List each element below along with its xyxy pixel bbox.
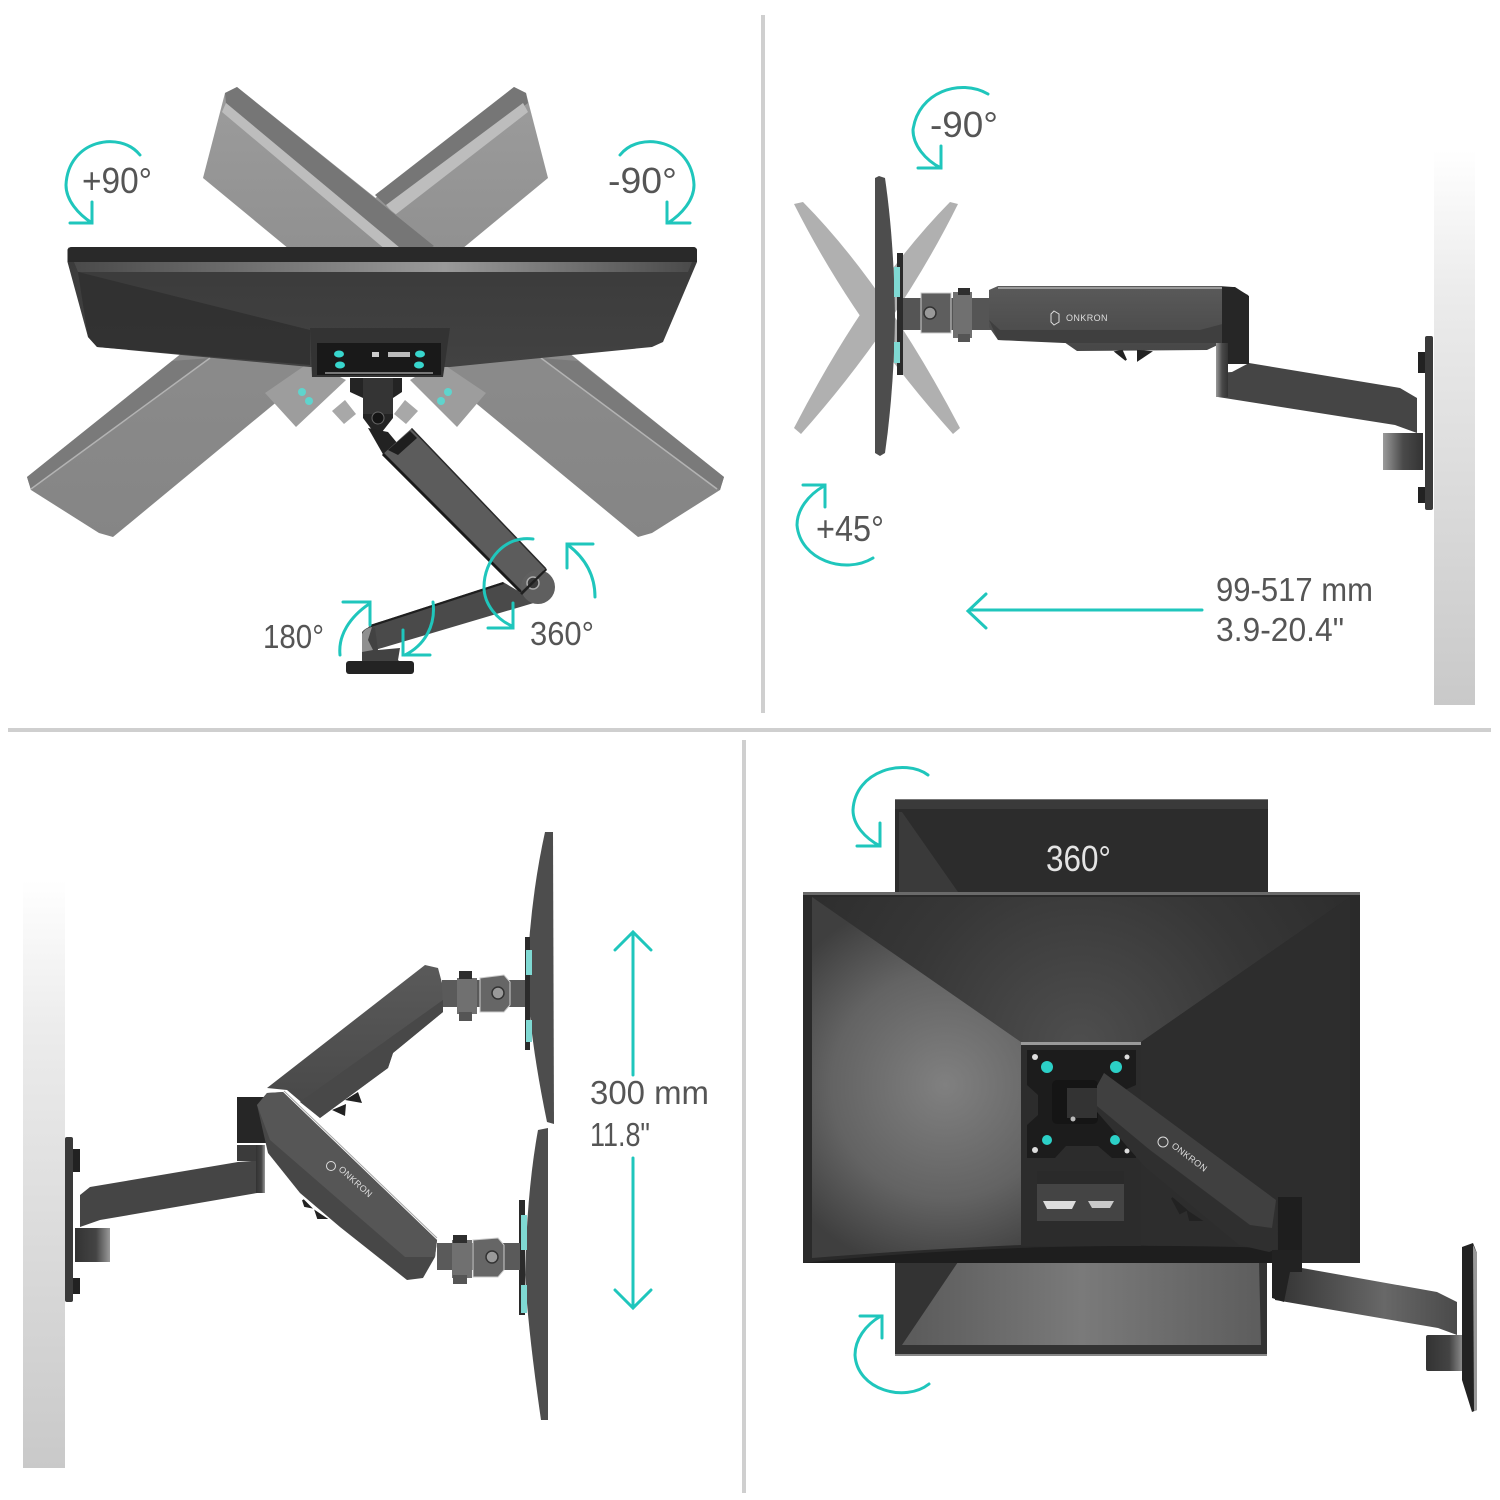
ghost mounting plates [265,362,486,427]
logo: ONKRON [1170,1141,1209,1174]
panel: height adjustment [23,832,709,1468]
tilt bracket [350,378,402,456]
arrow: 360 rotation [484,539,533,628]
vesa plate [894,253,903,375]
label: extension range: 99-517 mm [1216,571,1373,608]
tilt head [1052,1080,1098,1124]
logo [1158,1137,1209,1174]
ghost monitor: rotated left [27,87,548,537]
label: minus 90: -90° [608,160,677,201]
label: extension range: 3.9-20.4" [1216,611,1344,648]
gas spring arm [989,286,1249,360]
label: height range: 11.8" [590,1116,650,1153]
lower rotated monitor [895,1258,1267,1356]
arrow: 180 rotation right [403,602,433,655]
arrow: top rotation [853,768,928,846]
arrow: upper right rotation [567,544,595,597]
elbow joint [1272,1197,1302,1302]
wall [1434,150,1475,705]
wall plate [1462,1243,1477,1412]
lower arm [364,582,537,650]
label: 360: 360° [530,615,594,652]
wall plate [1418,336,1433,510]
upper rotated monitor [895,799,1268,895]
desk base [346,627,414,674]
long arm [382,428,546,593]
wall connector [1426,1335,1465,1371]
lower monitor [525,1128,548,1420]
label: height range: 300 mm [590,1074,709,1111]
wall [23,880,65,1468]
arrow: extension [968,594,1202,628]
upper tilt head [442,971,525,1021]
arrow: height range [615,932,651,1308]
label: minus 90: -90° [930,104,998,145]
elbow joint [1216,287,1249,397]
lower wall arm [1216,363,1417,433]
vesa bracket [1027,1050,1136,1158]
main monitor back [803,892,1360,1263]
panel: side tilt and extension [794,87,1475,705]
upper vesa plate [525,937,532,1050]
wall connector [1383,433,1423,470]
arrow: bottom rotation [855,1316,929,1393]
ghost monitor: rotated right [203,87,724,537]
panel: rotation rear view [803,768,1477,1412]
label: plus 45: +45° [816,508,884,549]
upper gas spring arm [267,965,443,1118]
label: plus 90: +90° [82,160,152,201]
wall plate [65,1137,80,1302]
panel: tilt rotation view [27,87,724,674]
lower tilt head [437,1235,520,1284]
label: 360: 360° [1046,838,1111,879]
logo [1051,311,1108,325]
lower wall arm [1275,1268,1457,1335]
gas spring arm [1097,1073,1278,1252]
label: height range [590,1074,709,1153]
lower vesa plate [519,1200,527,1315]
lower wall arm [80,1160,265,1227]
logo: ONKRON [337,1164,374,1200]
ghost monitors tilted [794,202,960,434]
arrow: minus 90 tilt [913,87,988,168]
tilt head [903,288,993,342]
arrow: 180 rotation left [340,602,370,655]
logo: ONKRON [1066,313,1108,323]
label: 180: 180° [263,618,324,655]
arrow: minus 90 rotation [620,142,694,223]
arm joint [520,568,555,604]
upper monitor [527,832,554,1124]
monitor side [875,176,895,456]
main monitor [68,247,697,367]
arrow: plus 45 tilt [797,485,873,565]
arrow: plus 90 rotation [66,142,140,223]
elbow joint [237,1097,267,1193]
connector ports [1037,1171,1124,1221]
wall connector [75,1228,110,1262]
monitor mounting plate [310,328,450,377]
label: extension range [1216,571,1373,648]
lower gas spring arm [257,1091,437,1280]
mounting plate panel [1021,1042,1141,1246]
